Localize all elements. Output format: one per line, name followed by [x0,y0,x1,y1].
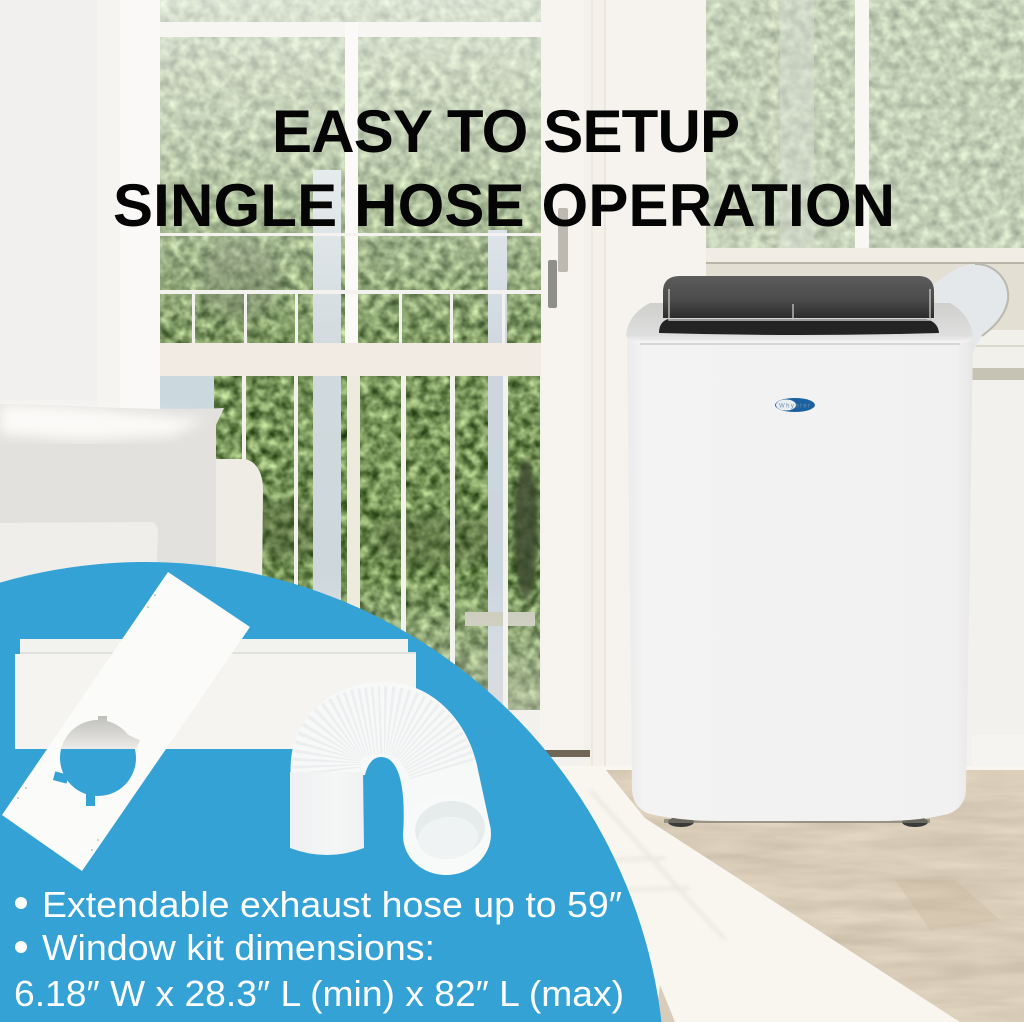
door handle [548,208,568,308]
window kit dimensions: 6.18″ W x 28.3″ L (min) x 82″ L (max) [14,973,624,1014]
bullet: exhaust hose: Extendable exhaust hose up to 59″ [42,884,622,925]
door window bars [160,22,542,710]
door window view: trees [160,0,541,720]
lower path [465,612,535,626]
french door frame [97,0,706,770]
sunlight grid shadows [590,790,725,940]
sofa armrest [215,459,263,590]
feature list text [14,884,624,1014]
brand badge: Whynter [779,404,811,410]
air outlet lid [663,276,934,318]
title [113,98,895,239]
title: SINGLE HOSE OPERATION [113,172,895,239]
icon: flexible exhaust hose [290,682,495,879]
right window with trees [706,0,1024,248]
hose corrugated arch [291,682,491,835]
back cushion [0,404,224,580]
dark undergrowth [514,460,538,600]
window sill and beige recess [706,248,1024,770]
air conditioner [626,276,973,827]
bullet: window kit: Window kit dimensions: [42,927,435,968]
blue accessory panel [0,562,662,1022]
left wall panel [0,0,97,410]
round hose end [399,791,495,879]
panel: window kit slider with hose opening [2,572,250,871]
top rim [626,303,973,343]
brand badge [775,398,815,412]
straight cuff [290,772,364,855]
front cushion [0,522,158,590]
title: EASY TO SETUP [272,98,740,165]
unit body [627,335,973,821]
sky patch [160,376,214,410]
panel: window kit extension [15,639,416,749]
exhaust hose at window [932,264,1008,352]
wooden floor [555,766,1024,1022]
sofa [0,404,263,590]
wheels [668,817,928,827]
birch trunks [313,170,341,620]
